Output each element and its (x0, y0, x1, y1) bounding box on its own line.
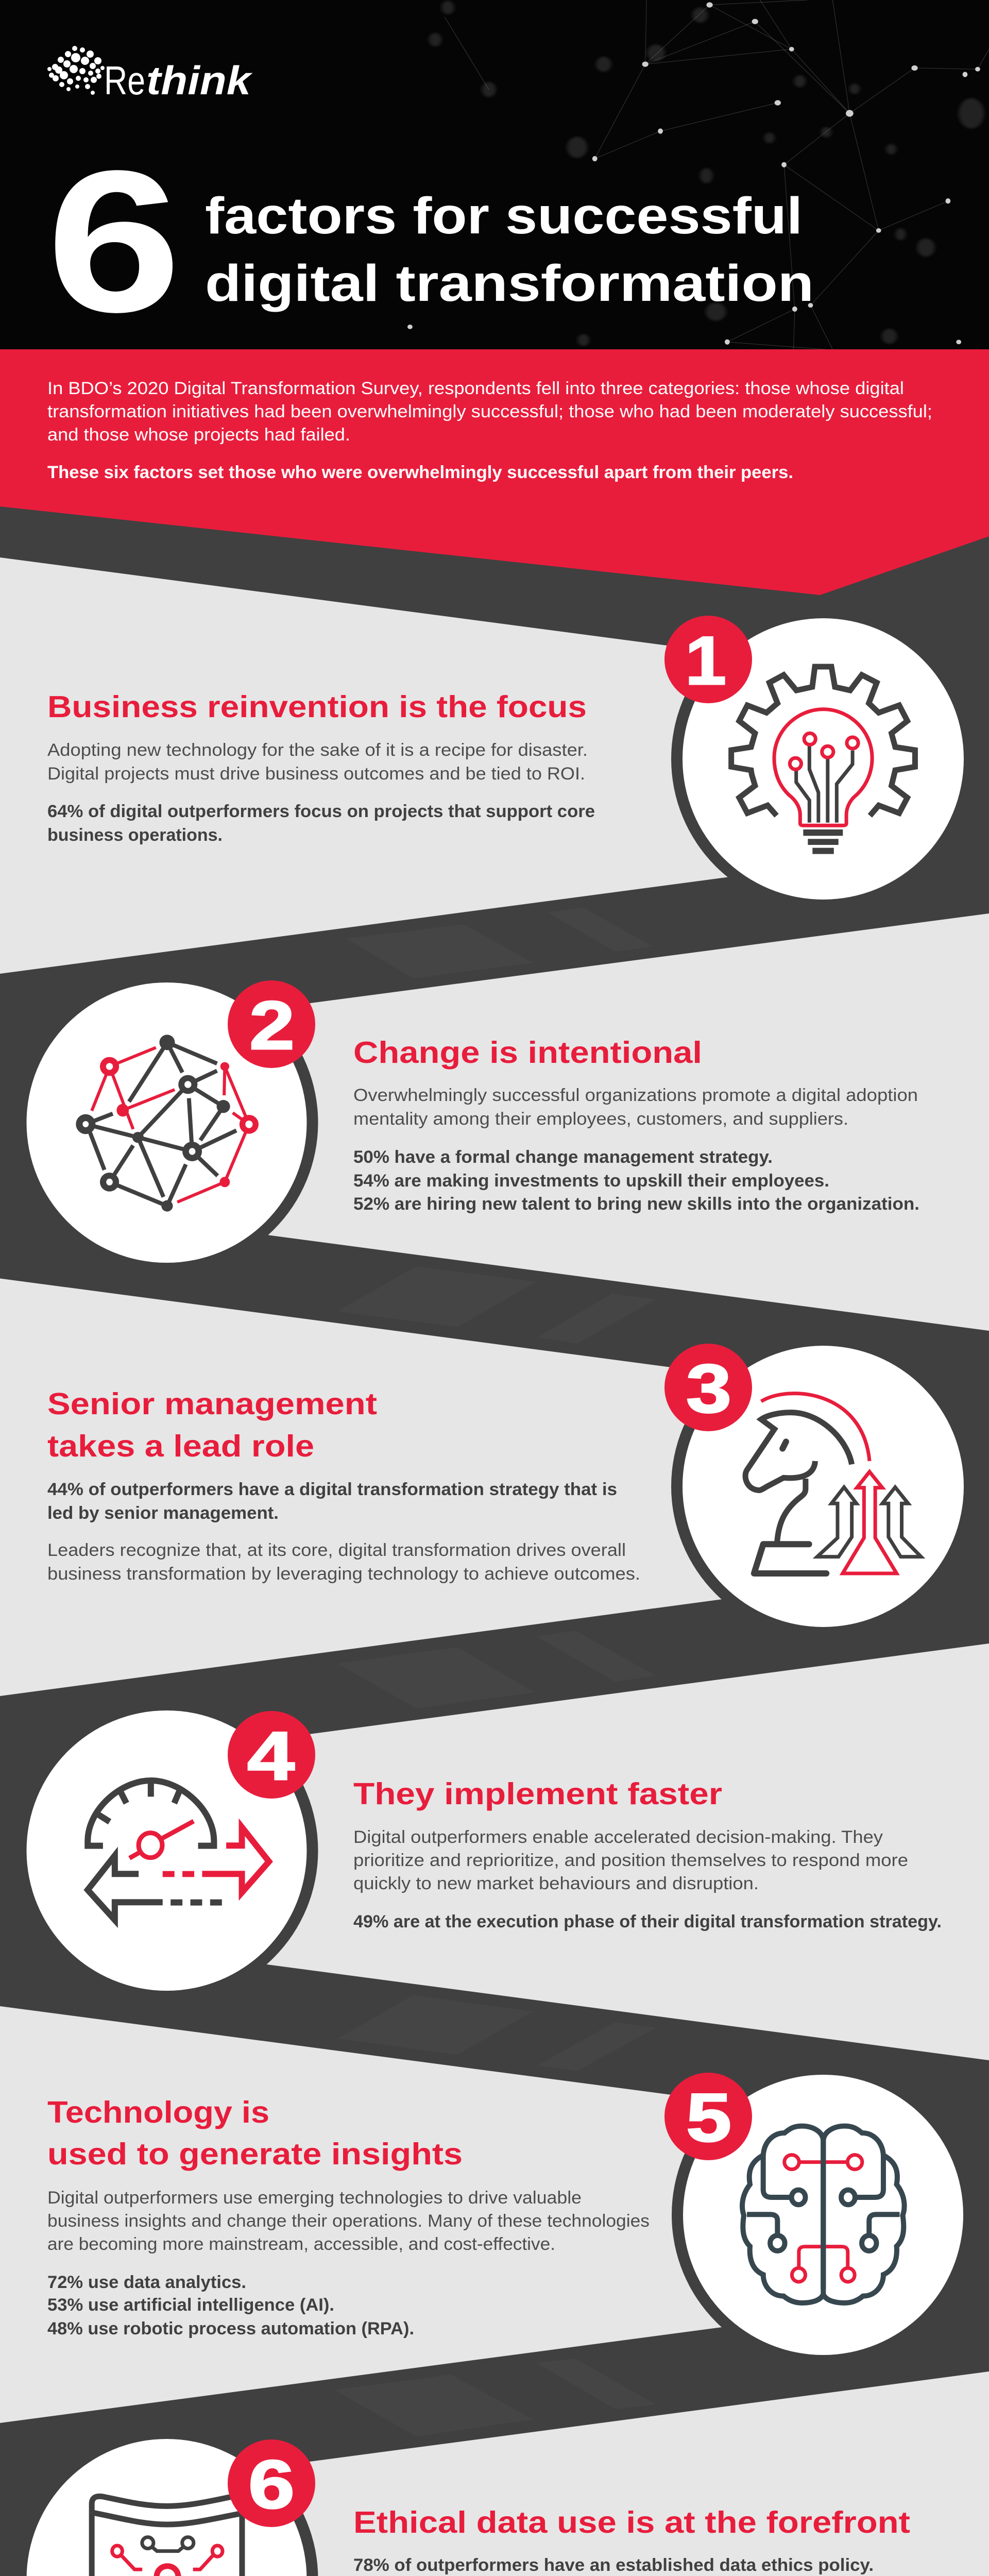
panel: factor 4 (15, 1643, 989, 2060)
panel: factor 5 (0, 2006, 975, 2423)
badge: 5 (664, 2073, 752, 2160)
heading: they implement faster: They implement faster (353, 1777, 722, 1811)
panel: header (0, 0, 989, 354)
badge: 3: 3 (686, 1351, 731, 1427)
title: 6 (46, 129, 181, 354)
text block: factor 5: 72% use data analytics. (47, 2273, 246, 2292)
icon: chess knight with arrows (745, 1394, 921, 1573)
badge: 4 (228, 1711, 315, 1799)
text block: factor 2: mentality among their employees, customers, and suppliers. (353, 1109, 848, 1129)
heading: senior management: takes a lead role (47, 1429, 314, 1463)
icon: network (76, 1035, 259, 1212)
text block: factor 1: Adopting new technology for the sake of it is a recipe for disaster. (47, 740, 588, 760)
text block: factor 3: 44% of outperformers have a digital transformation strategy that is (47, 1480, 617, 1499)
text block: factor 3: business transformation by leveraging technology to achieve outcomes. (47, 1564, 640, 1584)
panel: intro: and those whose projects had failed. (47, 425, 350, 445)
text block: factor 4 (353, 1827, 942, 1931)
text block: factor 4: prioritize and reprioritize, and position themselves to respond more (353, 1851, 908, 1870)
badge: 5: 5 (686, 2080, 731, 2156)
text block: factor 2: 50% have a formal change management strategy. (353, 1147, 773, 1167)
panel: factor 1 (0, 557, 975, 974)
panel: intro: These six factors set those who were overwhelmingly successful apart from their peers. (47, 463, 793, 482)
text block: factor 4: Digital outperformers enable accelerated decision-making. They (353, 1827, 883, 1847)
heading: change is intentional: Change is intentional (353, 1036, 702, 1070)
panel: factor 2 (15, 913, 989, 1331)
heading: ethical data use: Ethical data use is at the forefront (353, 2505, 910, 2539)
heading: technology (47, 2095, 463, 2171)
text block: factor 3: Leaders recognize that, at its core, digital transformation drives overall (47, 1540, 626, 1560)
text block: factor 5: 53% use artificial intelligence (AI). (47, 2295, 334, 2315)
text block: factor 2: 52% are hiring new talent to bring new skills into the organization. (353, 1194, 919, 1214)
text block: factor 1: 64% of digital outperformers focus on projects that support core (47, 802, 595, 821)
logo: Rethink: think (146, 58, 253, 103)
text block: factor 5 (47, 2188, 650, 2338)
icon: speedometer with arrows (88, 1781, 269, 1920)
icon: gear with light bulb (731, 667, 915, 854)
text block: factor 2: Overwhelmingly successful organizations promote a digital adoption (353, 1086, 918, 1105)
heading: senior management (47, 1387, 377, 1463)
title (46, 129, 814, 354)
title: factors for successful (205, 187, 803, 245)
text block: factor 5: are becoming more mainstream, accessible, and cost-effective. (47, 2234, 555, 2254)
text block: factor 5: 48% use robotic process automation (RPA). (47, 2319, 414, 2338)
badge: 2: 2 (249, 988, 295, 1064)
heading: technology: used to generate insights (47, 2137, 463, 2171)
text block: factor 1: business operations. (47, 825, 223, 845)
heading: business reinvention: Business reinvention is the focus (47, 690, 587, 724)
badge: 1: 1 (685, 623, 726, 699)
panel: intro: transformation initiatives had been overwhelmingly successful; those who had been moderately successful; (47, 402, 932, 421)
text block: factor 1 (47, 740, 595, 845)
badge: 6: 6 (248, 2447, 295, 2523)
icon: brain circuit (742, 2126, 905, 2303)
text block: factor 5: Digital outperformers use emerging technologies to drive valuable (47, 2188, 582, 2208)
badge: 6 (228, 2439, 315, 2527)
text block: factor 3: led by senior management. (47, 1503, 279, 1523)
text block: factor 1: Digital projects must drive business outcomes and be tied to ROI. (47, 764, 585, 784)
text block: factor 2 (353, 1086, 919, 1214)
panel: factor 3 (0, 1279, 975, 1696)
icon: shield with lock (92, 2496, 242, 2576)
text block: factor 4: 49% are at the execution phase of their digital transformation strategy. (353, 1912, 942, 1931)
text block: factor 3 (47, 1480, 640, 1584)
logo: Rethink: Re (104, 58, 145, 103)
heading: senior management: Senior management (47, 1387, 377, 1421)
text block: factor 4: quickly to new market behaviours and disruption. (353, 1874, 759, 1893)
title: digital transformation (205, 255, 814, 312)
heading: technology: Technology is (47, 2095, 269, 2129)
panel: intro: In BDO’s 2020 Digital Transformation Survey, respondents fell into three categories: those whose digital (47, 379, 904, 398)
text block: factor 5: business insights and change their operations. Many of these technologies (47, 2211, 650, 2231)
badge: 1 (664, 616, 752, 703)
logo: Rethink (47, 46, 253, 103)
badge: 4: 4 (247, 1718, 295, 1794)
badge: 2 (228, 980, 315, 1068)
text block: factor 2: 54% are making investments to upskill their employees. (353, 1171, 829, 1191)
text block: factor 6: 78% of outperformers have an established data ethics policy. (353, 2555, 874, 2575)
panel: factor 6 (15, 2371, 989, 2576)
badge: 3 (664, 1344, 752, 1431)
panel: intro (0, 349, 989, 595)
